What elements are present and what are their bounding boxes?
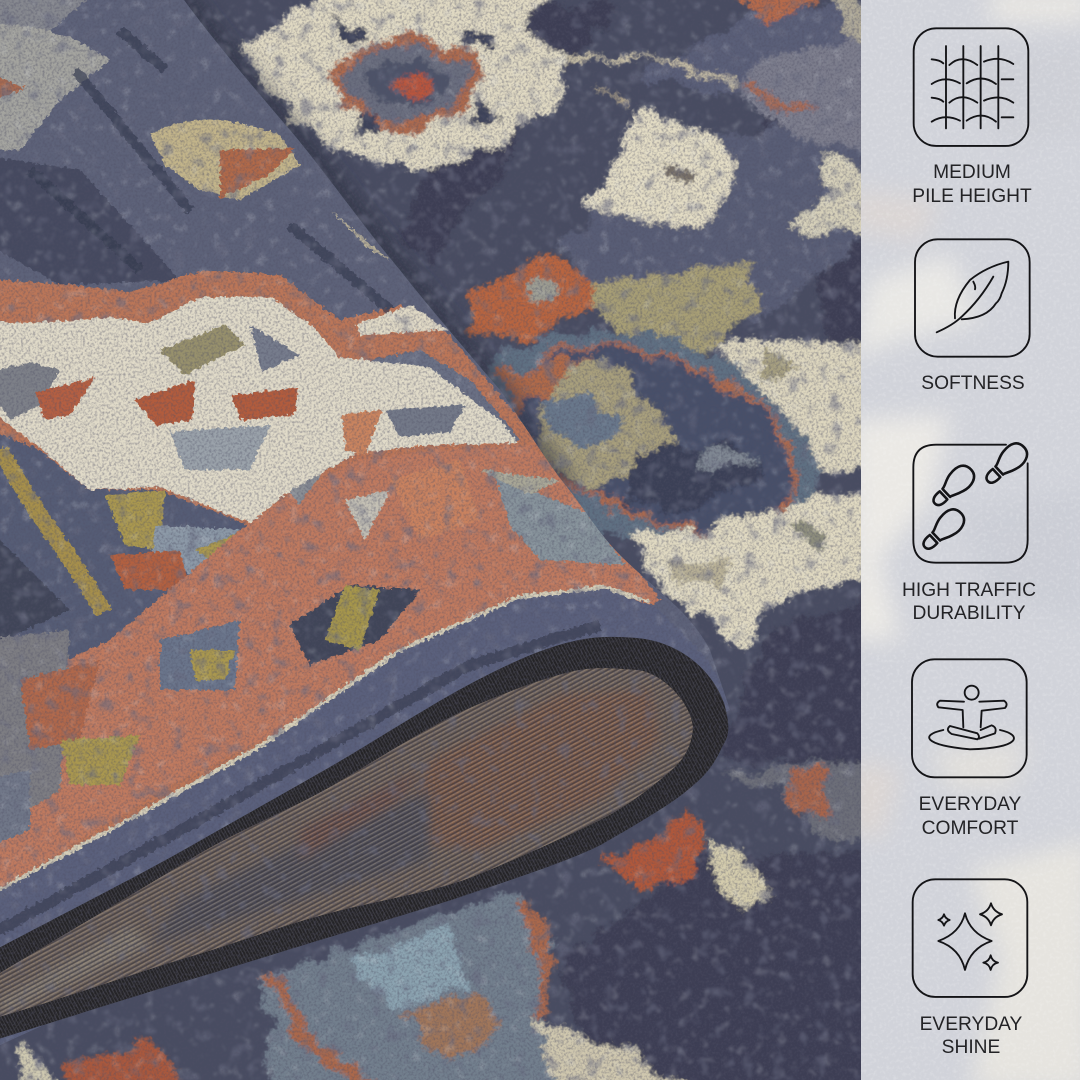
feature: everyday shine xyxy=(913,879,1027,1058)
feature: softness xyxy=(915,239,1030,394)
icon: seated person on rug xyxy=(912,659,1027,777)
floor streaks xyxy=(400,0,880,1080)
panel background blotches xyxy=(850,0,1080,1080)
panel: features sidebar xyxy=(850,0,1080,1080)
carpet grain overlay xyxy=(0,0,861,1080)
rust and tan flower xyxy=(468,250,605,340)
icon: feather xyxy=(915,239,1030,357)
backing weave xyxy=(0,660,705,1030)
label: everyday shine: EVERYDAY xyxy=(920,1014,1023,1035)
label: everyday shine: SHINE xyxy=(942,1037,1000,1058)
icon: sparkles xyxy=(913,879,1027,997)
feature: medium pile height xyxy=(912,28,1032,207)
top right rust motif xyxy=(730,0,815,25)
label: everyday comfort: EVERYDAY xyxy=(919,794,1022,815)
roll cast shadow xyxy=(178,0,567,487)
cream strip on the fold xyxy=(355,305,448,335)
cream medallion, drawn above the mottling xyxy=(0,297,518,523)
main rust border xyxy=(68,524,662,660)
black binding and underside xyxy=(0,637,728,1040)
streaks on roll top xyxy=(30,30,390,310)
upper slate field xyxy=(0,0,88,32)
feature: everyday comfort xyxy=(912,659,1027,839)
rolled rug body xyxy=(0,0,730,1045)
central medallion xyxy=(486,324,824,542)
fabric mottling xyxy=(0,0,861,1080)
cream motif upper right xyxy=(585,112,735,225)
feature: high traffic durability xyxy=(902,439,1036,624)
label: everyday comfort: COMFORT xyxy=(922,818,1019,839)
icon: footprints xyxy=(913,439,1032,563)
cream right motifs xyxy=(715,339,880,470)
bottom floral panel xyxy=(256,890,559,1080)
label: medium pile height: MEDIUM xyxy=(933,162,1011,183)
edge slate band xyxy=(0,588,650,900)
lower right rust motif xyxy=(598,805,705,885)
label: softness: SOFTNESS xyxy=(921,373,1025,394)
label: high traffic durability: HIGH TRAFFIC xyxy=(902,580,1036,601)
label: medium pile height: PILE HEIGHT xyxy=(912,186,1032,207)
label: high traffic durability: DURABILITY xyxy=(912,603,1026,624)
rust outline of medallion xyxy=(0,270,660,900)
inner coloured field xyxy=(0,434,248,659)
icon: pile fibres xyxy=(914,28,1028,146)
top cream flower xyxy=(243,0,566,168)
